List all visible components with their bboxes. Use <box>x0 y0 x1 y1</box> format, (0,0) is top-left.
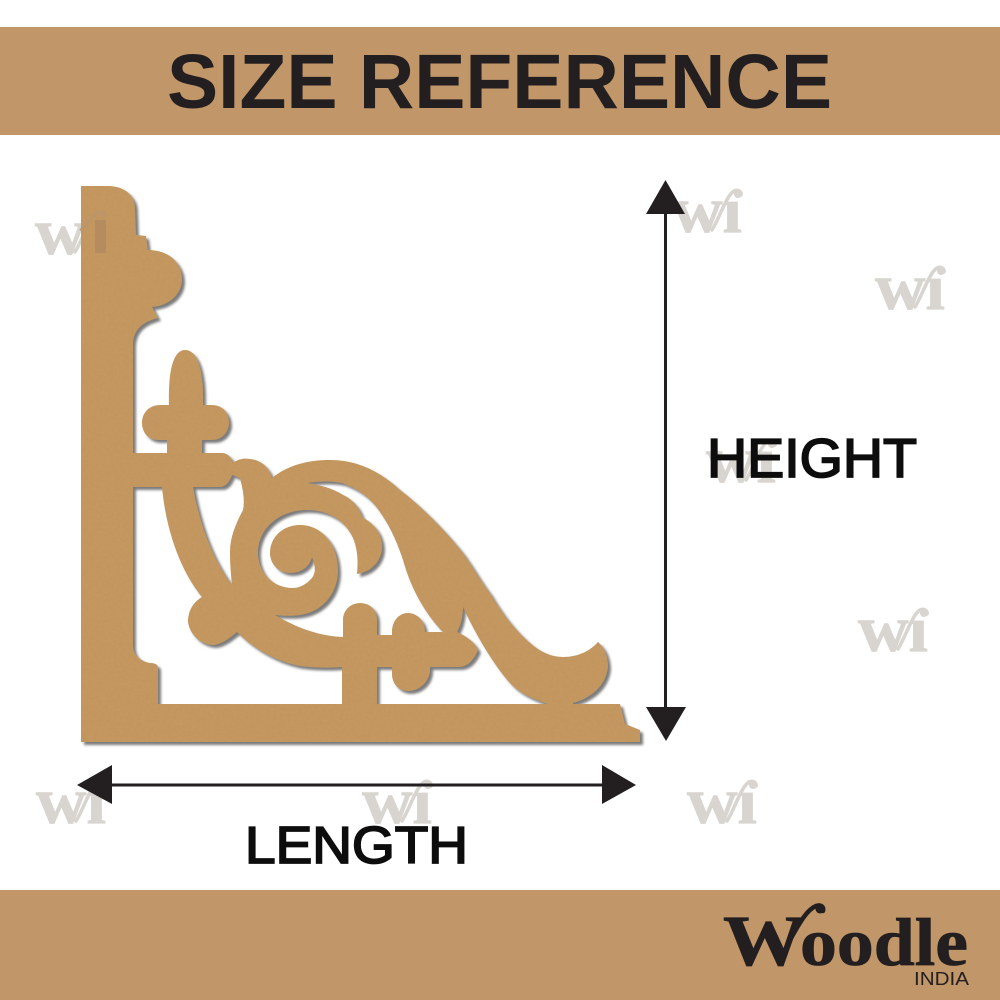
footer band <box>0 890 1000 1000</box>
height label: HEIGHT <box>707 427 917 489</box>
wooden bracket <box>81 186 643 745</box>
logo <box>723 901 969 989</box>
length arrow <box>77 765 636 804</box>
logo: W <box>723 901 805 981</box>
logo: oodle <box>800 904 968 980</box>
logo: INDIA <box>914 969 969 989</box>
height arrow <box>646 180 686 741</box>
watermark on bracket <box>81 212 106 253</box>
title: SIZE REFERENCE <box>167 39 832 125</box>
watermarks <box>35 174 945 838</box>
length label: LENGTH <box>245 817 468 875</box>
header band <box>0 27 1000 135</box>
